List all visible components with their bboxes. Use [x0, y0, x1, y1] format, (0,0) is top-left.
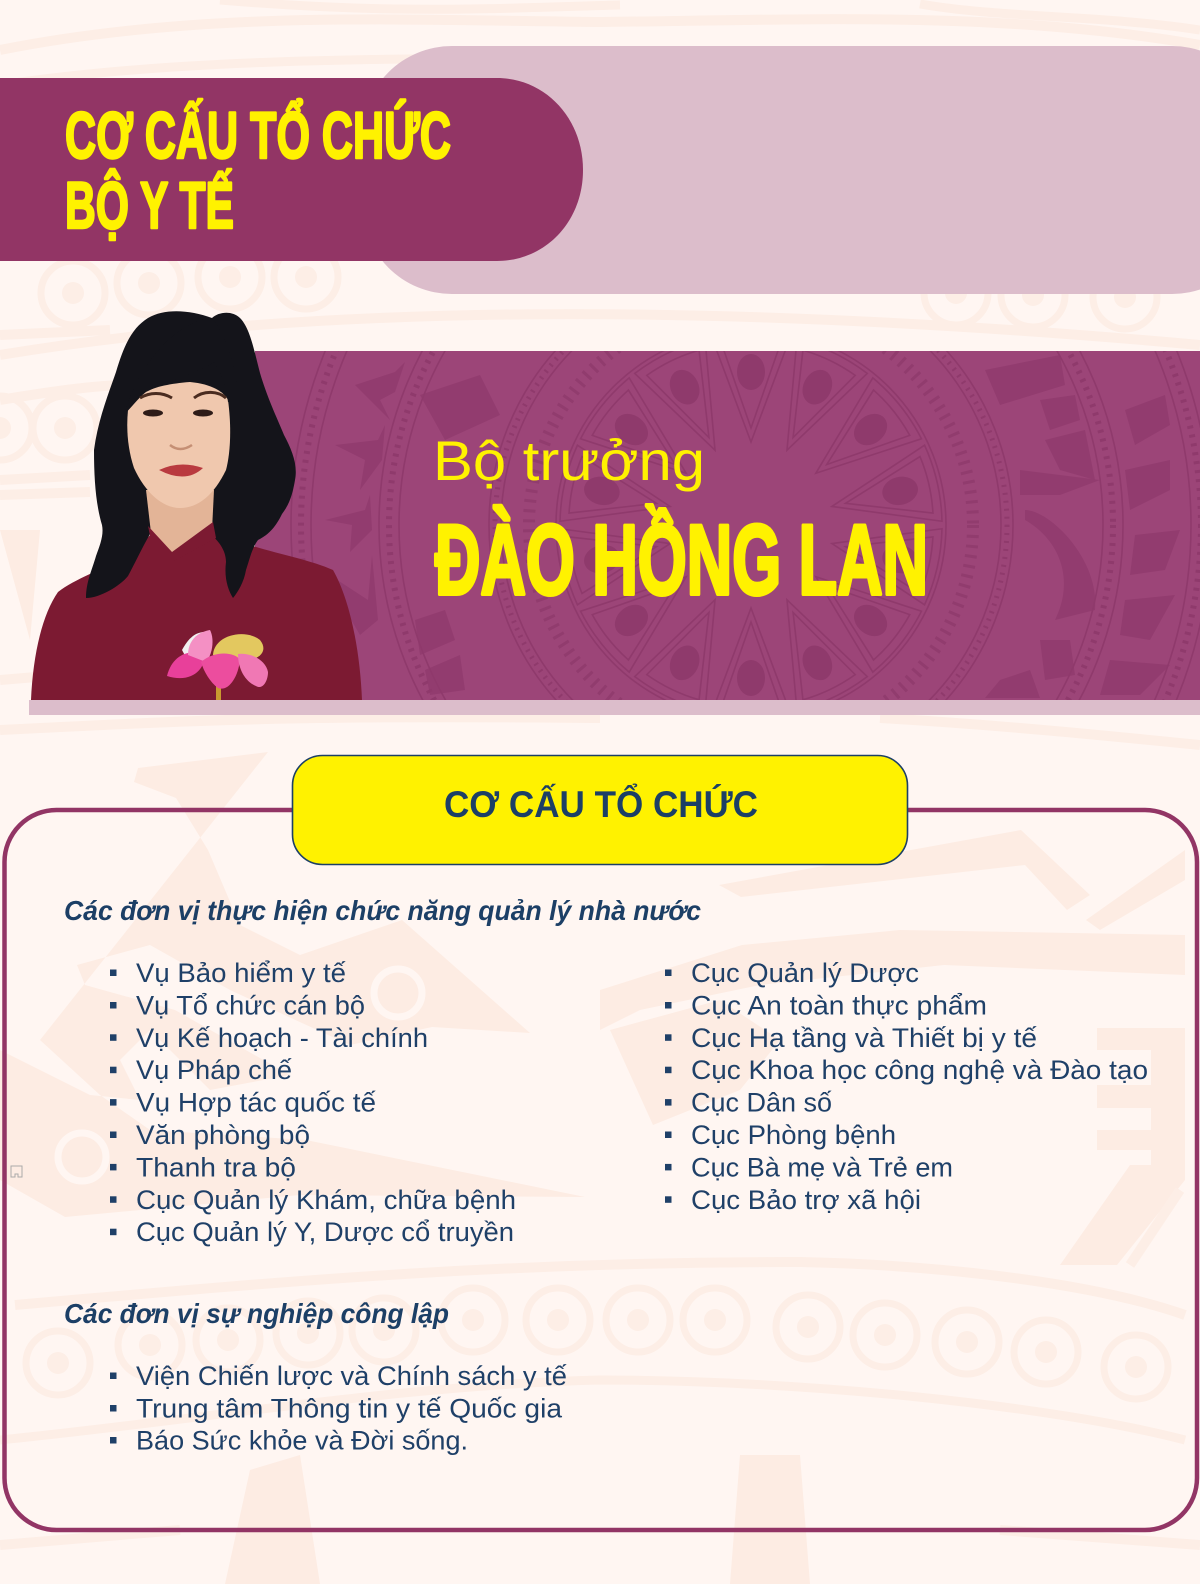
list: departments column 1: Cục Quản lý Y, Dược cổ truyền — [136, 1217, 514, 1247]
list: departments column 1: Vụ Kế hoạch - Tài chính — [136, 1023, 428, 1053]
lotus brooch — [167, 630, 268, 700]
list: departments column 2: Cục An toàn thực phẩm — [691, 990, 987, 1020]
hair fringe — [124, 318, 238, 414]
list: departments column 1: Cục Quản lý Khám, chữa bệnh — [136, 1185, 516, 1215]
hair — [86, 311, 296, 598]
panel: organisation structure — [4, 756, 1197, 1530]
list: departments column 1: Văn phòng bộ — [136, 1120, 310, 1150]
list: departments column 1 — [110, 958, 516, 1247]
list: departments column 1: Thanh tra bộ — [136, 1152, 296, 1182]
list: departments column 2: Cục Bà mẹ và Trẻ em — [691, 1152, 953, 1182]
list: public service units — [110, 1361, 567, 1456]
section heading pill: CƠ CẤU TỔ CHỨC — [444, 782, 758, 825]
list: departments column 2: Cục Quản lý Dược — [691, 958, 919, 988]
dress — [31, 528, 362, 700]
section heading pill — [292, 756, 908, 864]
heading: public service units: Các đơn vị sự nghiệp công lập — [64, 1298, 449, 1329]
title: CƠ CẤU TỔ CHỨC — [65, 98, 451, 172]
list: departments column 1: Vụ Hợp tác quốc tế — [136, 1088, 376, 1118]
facial features — [140, 392, 226, 477]
list: public service units: Trung tâm Thông tin y tế Quốc gia — [136, 1393, 563, 1423]
minister label: Bộ trưởng — [433, 429, 705, 492]
neck and collar — [146, 490, 216, 562]
list: departments column 2: Cục Khoa học công nghệ và Đào tạo — [691, 1055, 1148, 1085]
header band: light pill — [362, 46, 1200, 294]
list: departments column 2: Cục Dân số — [691, 1088, 832, 1118]
list: departments column 2: Cục Bảo trợ xã hội — [691, 1185, 921, 1215]
list: public service units: Viện Chiến lược và Chính sách y tế — [136, 1361, 567, 1391]
title: BỘ Y TẾ — [65, 168, 234, 242]
list: departments column 1: Vụ Tổ chức cán bộ — [136, 990, 365, 1020]
heading: state management units: Các đơn vị thực hiện chức năng quản lý nhà nước — [64, 895, 701, 926]
minister banner with bronze-drum pattern — [255, 351, 1200, 700]
minister name: ĐÀO HỒNG LAN — [435, 504, 928, 615]
list: departments column 1: Vụ Pháp chế — [136, 1055, 292, 1085]
face — [127, 382, 230, 508]
list: departments column 2 — [665, 958, 1148, 1215]
icon: small page mark — [11, 1166, 22, 1177]
list: departments column 1: Vụ Bảo hiểm y tế — [136, 958, 346, 988]
list: public service units: Báo Sức khỏe và Đời sống. — [136, 1426, 468, 1456]
list: departments column 2: Cục Phòng bệnh — [691, 1120, 896, 1150]
list: departments column 2: Cục Hạ tầng và Thiết bị y tế — [691, 1023, 1037, 1053]
title — [65, 98, 451, 242]
minister banner shadow strip — [29, 700, 1200, 715]
header band: dark title pill — [0, 78, 583, 261]
portrait of the minister — [31, 311, 362, 700]
